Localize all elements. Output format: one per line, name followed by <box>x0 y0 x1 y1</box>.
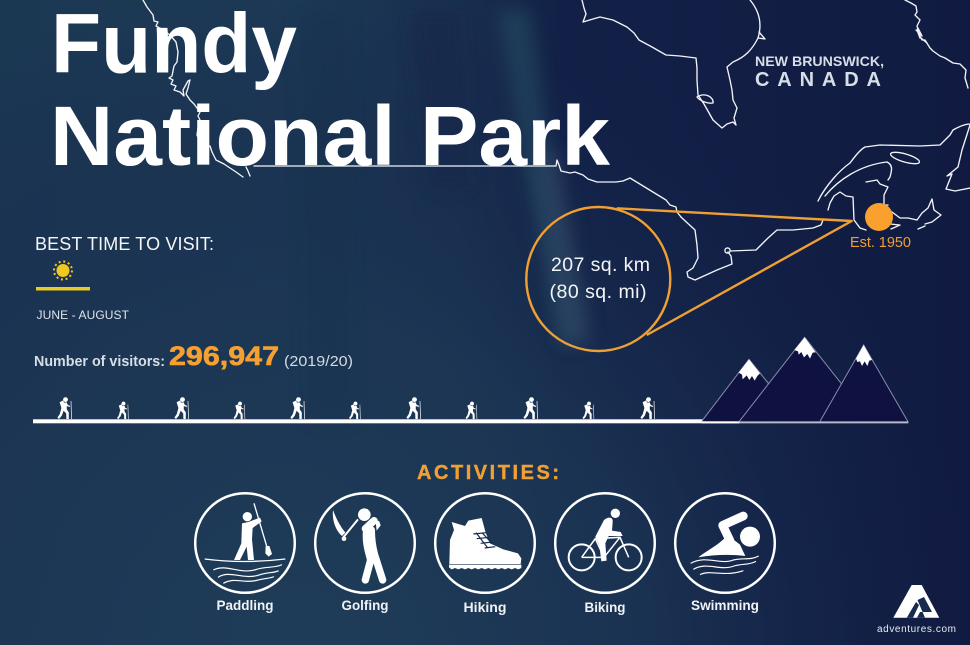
mountains <box>702 337 908 422</box>
adventures.com logo: adventures.com <box>877 624 956 635</box>
hikers row <box>57 397 655 419</box>
activity: biking <box>555 493 655 593</box>
title: National Park <box>50 89 610 183</box>
Great Lakes and St Lawrence outline <box>681 217 823 280</box>
season text: JUNE - AUGUST <box>36 308 130 322</box>
Newfoundland outline <box>946 125 970 191</box>
location label <box>755 53 884 91</box>
activities heading: ACTIVITIES: <box>417 462 559 484</box>
activity labels: Swimming <box>691 597 759 613</box>
activity labels: Paddling <box>216 597 274 613</box>
visitors statistic: Number of visitors: <box>34 354 165 370</box>
best time to visit heading: BEST TIME TO VISIT: <box>35 234 214 254</box>
map callout: park area: (80 sq. mi) <box>550 281 646 303</box>
Anticosti Island <box>889 150 921 166</box>
Gulf of St Lawrence outline <box>818 124 970 201</box>
activity labels: Biking <box>584 599 626 615</box>
map outlines <box>143 0 970 280</box>
title <box>50 0 610 183</box>
map callout: park area <box>526 207 852 351</box>
Hudson Bay outline <box>582 0 760 128</box>
activity: swimming <box>675 493 775 593</box>
visitors statistic: 296,947 <box>169 341 279 371</box>
northeast coast outline <box>905 0 968 88</box>
activity: hiking <box>435 493 535 593</box>
visitors statistic: (2019/20) <box>284 353 353 370</box>
park location marker: Est. 1950 <box>850 235 911 251</box>
activity: paddling <box>195 493 295 593</box>
location label: NEW BRUNSWICK, <box>755 53 884 69</box>
activity: golfing <box>315 493 415 593</box>
map callout: park area: 207 sq. km <box>551 254 650 276</box>
activity labels: Hiking <box>464 599 506 615</box>
James Bay island <box>697 95 713 103</box>
park location marker <box>850 203 911 251</box>
west coast outline <box>143 0 243 177</box>
adventures.com logo <box>877 585 956 635</box>
southern border line <box>254 160 681 217</box>
icon: sun <box>54 262 72 280</box>
location label: CANADA <box>755 69 881 91</box>
activity labels: Golfing <box>342 597 388 613</box>
activity labels <box>216 597 759 615</box>
ground line <box>33 419 703 423</box>
visitors statistic <box>34 341 353 371</box>
season bar <box>36 287 90 290</box>
